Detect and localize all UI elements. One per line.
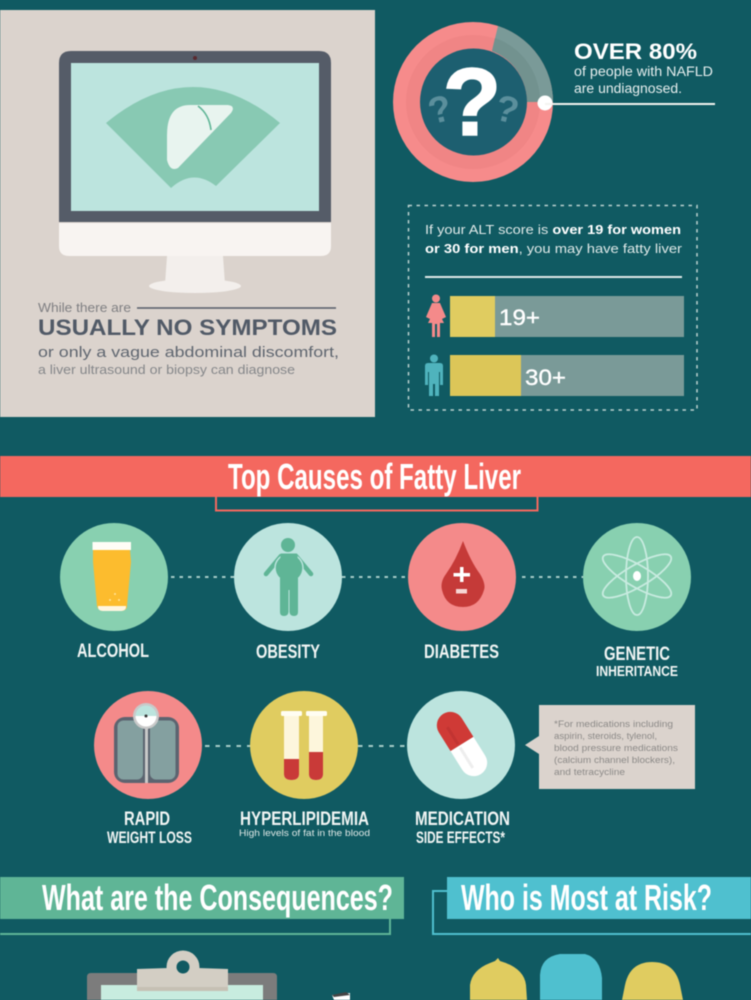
heading: what are the consequences (0, 877, 404, 934)
cause: genetic inheritance: INHERITANCE (596, 663, 678, 680)
heading: top causes of fatty liver: Top Causes of Fatty Liver (228, 456, 521, 497)
icon: question marks: ? (491, 87, 523, 132)
cause: rapid weight loss: WEIGHT LOSS (107, 828, 192, 847)
callout: medications note: blood pressure medications (554, 743, 679, 753)
text: no symptoms statement: or only a vague abdominal discomfort, (38, 344, 339, 361)
icon: question marks: ? (443, 49, 501, 156)
cause: medication side effects (407, 691, 515, 847)
callout: medications note: aspirin, steroids, tylenol, (554, 731, 657, 741)
text: ALT score explanation: If your ALT score is over 19 for women (425, 223, 681, 237)
callout: medications note: and tetracycline (554, 767, 625, 777)
text: no symptoms statement (38, 301, 339, 377)
heading: top causes of fatty liver (0, 456, 751, 510)
text: over 80 percent statistic: of people with NAFLD (574, 64, 713, 79)
cause: alcohol: ALCOHOL (77, 641, 149, 662)
cause: obesity (234, 523, 342, 663)
cause: genetic inheritance: GENETIC (604, 644, 670, 665)
heading: who is most at risk (433, 877, 751, 934)
text: no symptoms statement: USUALLY NO SYMPTOMS (38, 315, 337, 340)
cause: medication side effects: SIDE EFFECTS* (416, 828, 505, 847)
text: no symptoms statement: While there are (38, 301, 131, 315)
text: over 80 percent statistic: are undiagnosed. (574, 81, 682, 96)
icon: clipboard (87, 950, 277, 1000)
cause: rapid weight loss: RAPID (124, 809, 170, 830)
bar: women 19+ (450, 296, 684, 337)
icon: question marks (424, 49, 523, 156)
text: no symptoms statement: a liver ultrasound or biopsy can diagnose (38, 363, 295, 377)
bar: men 30+: 30+ (525, 365, 566, 390)
cause: rapid weight loss (94, 691, 202, 847)
icon: capsule (432, 707, 492, 781)
icon: at-risk people (470, 954, 683, 1000)
connectors: first row (171, 576, 583, 578)
callout: medications note (525, 705, 695, 789)
callout: medications note: (calcium channel blockers), (554, 755, 675, 765)
icon: blood drop (442, 541, 484, 607)
icon: question marks: ? (424, 87, 456, 132)
bar: women 19+: 19+ (499, 305, 540, 330)
cause: diabetes: DIABETES (424, 642, 499, 663)
text: over 80 percent statistic (574, 39, 713, 96)
icon: test tubes (281, 711, 327, 780)
cause: obesity: OBESITY (256, 642, 320, 663)
icon: man (425, 354, 443, 396)
heading: what are the consequences: What are the Consequences? (42, 877, 393, 918)
icon: beer glass (92, 542, 131, 611)
cause: hyperlipidemia (239, 691, 370, 839)
cause: hyperlipidemia: HYPERLIPIDEMIA (240, 809, 369, 830)
cause: alcohol (60, 523, 168, 662)
text: ALT score explanation (425, 223, 682, 256)
cause: hyperlipidemia: High levels of fat in the blood (239, 828, 370, 839)
icon: pen (332, 992, 350, 1000)
cause: genetic inheritance (583, 523, 691, 680)
icon: desktop monitor with liver ultrasound (59, 51, 331, 293)
bar: men 30+ (450, 355, 684, 396)
icon: atom (598, 537, 676, 615)
callout: medications note: *For medications including (554, 719, 673, 729)
icon: woman (426, 294, 446, 337)
panel: ultrasound diagnosis (0, 10, 375, 417)
connectors: second row (205, 745, 407, 747)
panel: ALT score (408, 206, 697, 410)
text: over 80 percent statistic: OVER 80% (574, 39, 697, 64)
icon: obese person (266, 538, 311, 616)
icon: bathroom scale (114, 703, 179, 783)
cause: diabetes (408, 523, 516, 663)
cause: medication side effects: MEDICATION (415, 809, 510, 830)
chart: over 80% undiagnosed donut (393, 22, 715, 182)
text: ALT score explanation: or 30 for men , you may have fatty liver (425, 242, 682, 256)
